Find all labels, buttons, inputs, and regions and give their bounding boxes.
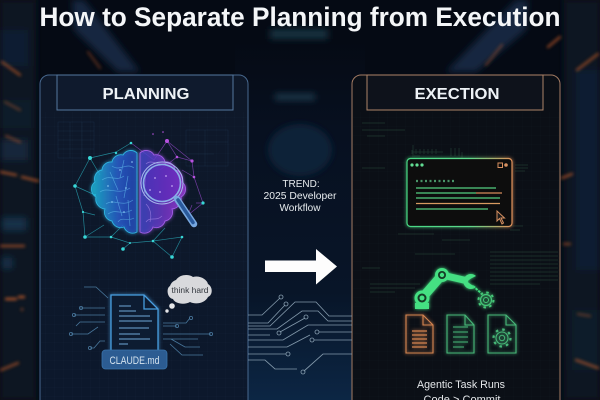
title: How to Separate Planning from Execution: [40, 2, 560, 32]
trend label: [264, 179, 337, 214]
caption: agentic task runs: [417, 379, 505, 400]
icon: green document with gear: [488, 315, 516, 353]
icon: brain with magnifying glass and network: [73, 131, 205, 259]
arrow: planning to execution: [265, 249, 337, 284]
thought bubble: think hard: think hard: [172, 285, 209, 295]
brain hemispheres: [91, 151, 186, 233]
brain folds: [100, 160, 168, 226]
circuit traces around document: [69, 287, 213, 355]
icon: terminal window: [407, 158, 512, 226]
document text lines: [119, 306, 152, 344]
execution header: [367, 75, 543, 110]
CLAUDE.md badge: CLAUDE.md: [110, 355, 160, 367]
planning header: [57, 75, 233, 110]
icon: document: [111, 295, 158, 352]
CLAUDE.md badge: [102, 350, 167, 369]
panel: execution: [352, 75, 560, 400]
trend label: 2025 Developer: [264, 191, 337, 202]
trend label: Workflow: [280, 203, 321, 214]
planning header: PLANNING: [102, 86, 190, 103]
caption: agentic task runs: Agentic Task Runs: [417, 379, 505, 391]
execution header: EXECTION: [414, 86, 500, 103]
trend label: TREND:: [282, 179, 320, 190]
icon: orange document: [406, 315, 433, 353]
circuit connector between panels: [248, 295, 352, 374]
panel: planning: [40, 75, 248, 400]
magnifying glass: [141, 162, 194, 224]
network lines and nodes: [73, 131, 205, 259]
icon: green document: [447, 315, 474, 353]
thought bubble: think hard: [165, 275, 212, 313]
faint code background: [362, 123, 558, 292]
icon: robotic arm with gear: [414, 268, 494, 309]
